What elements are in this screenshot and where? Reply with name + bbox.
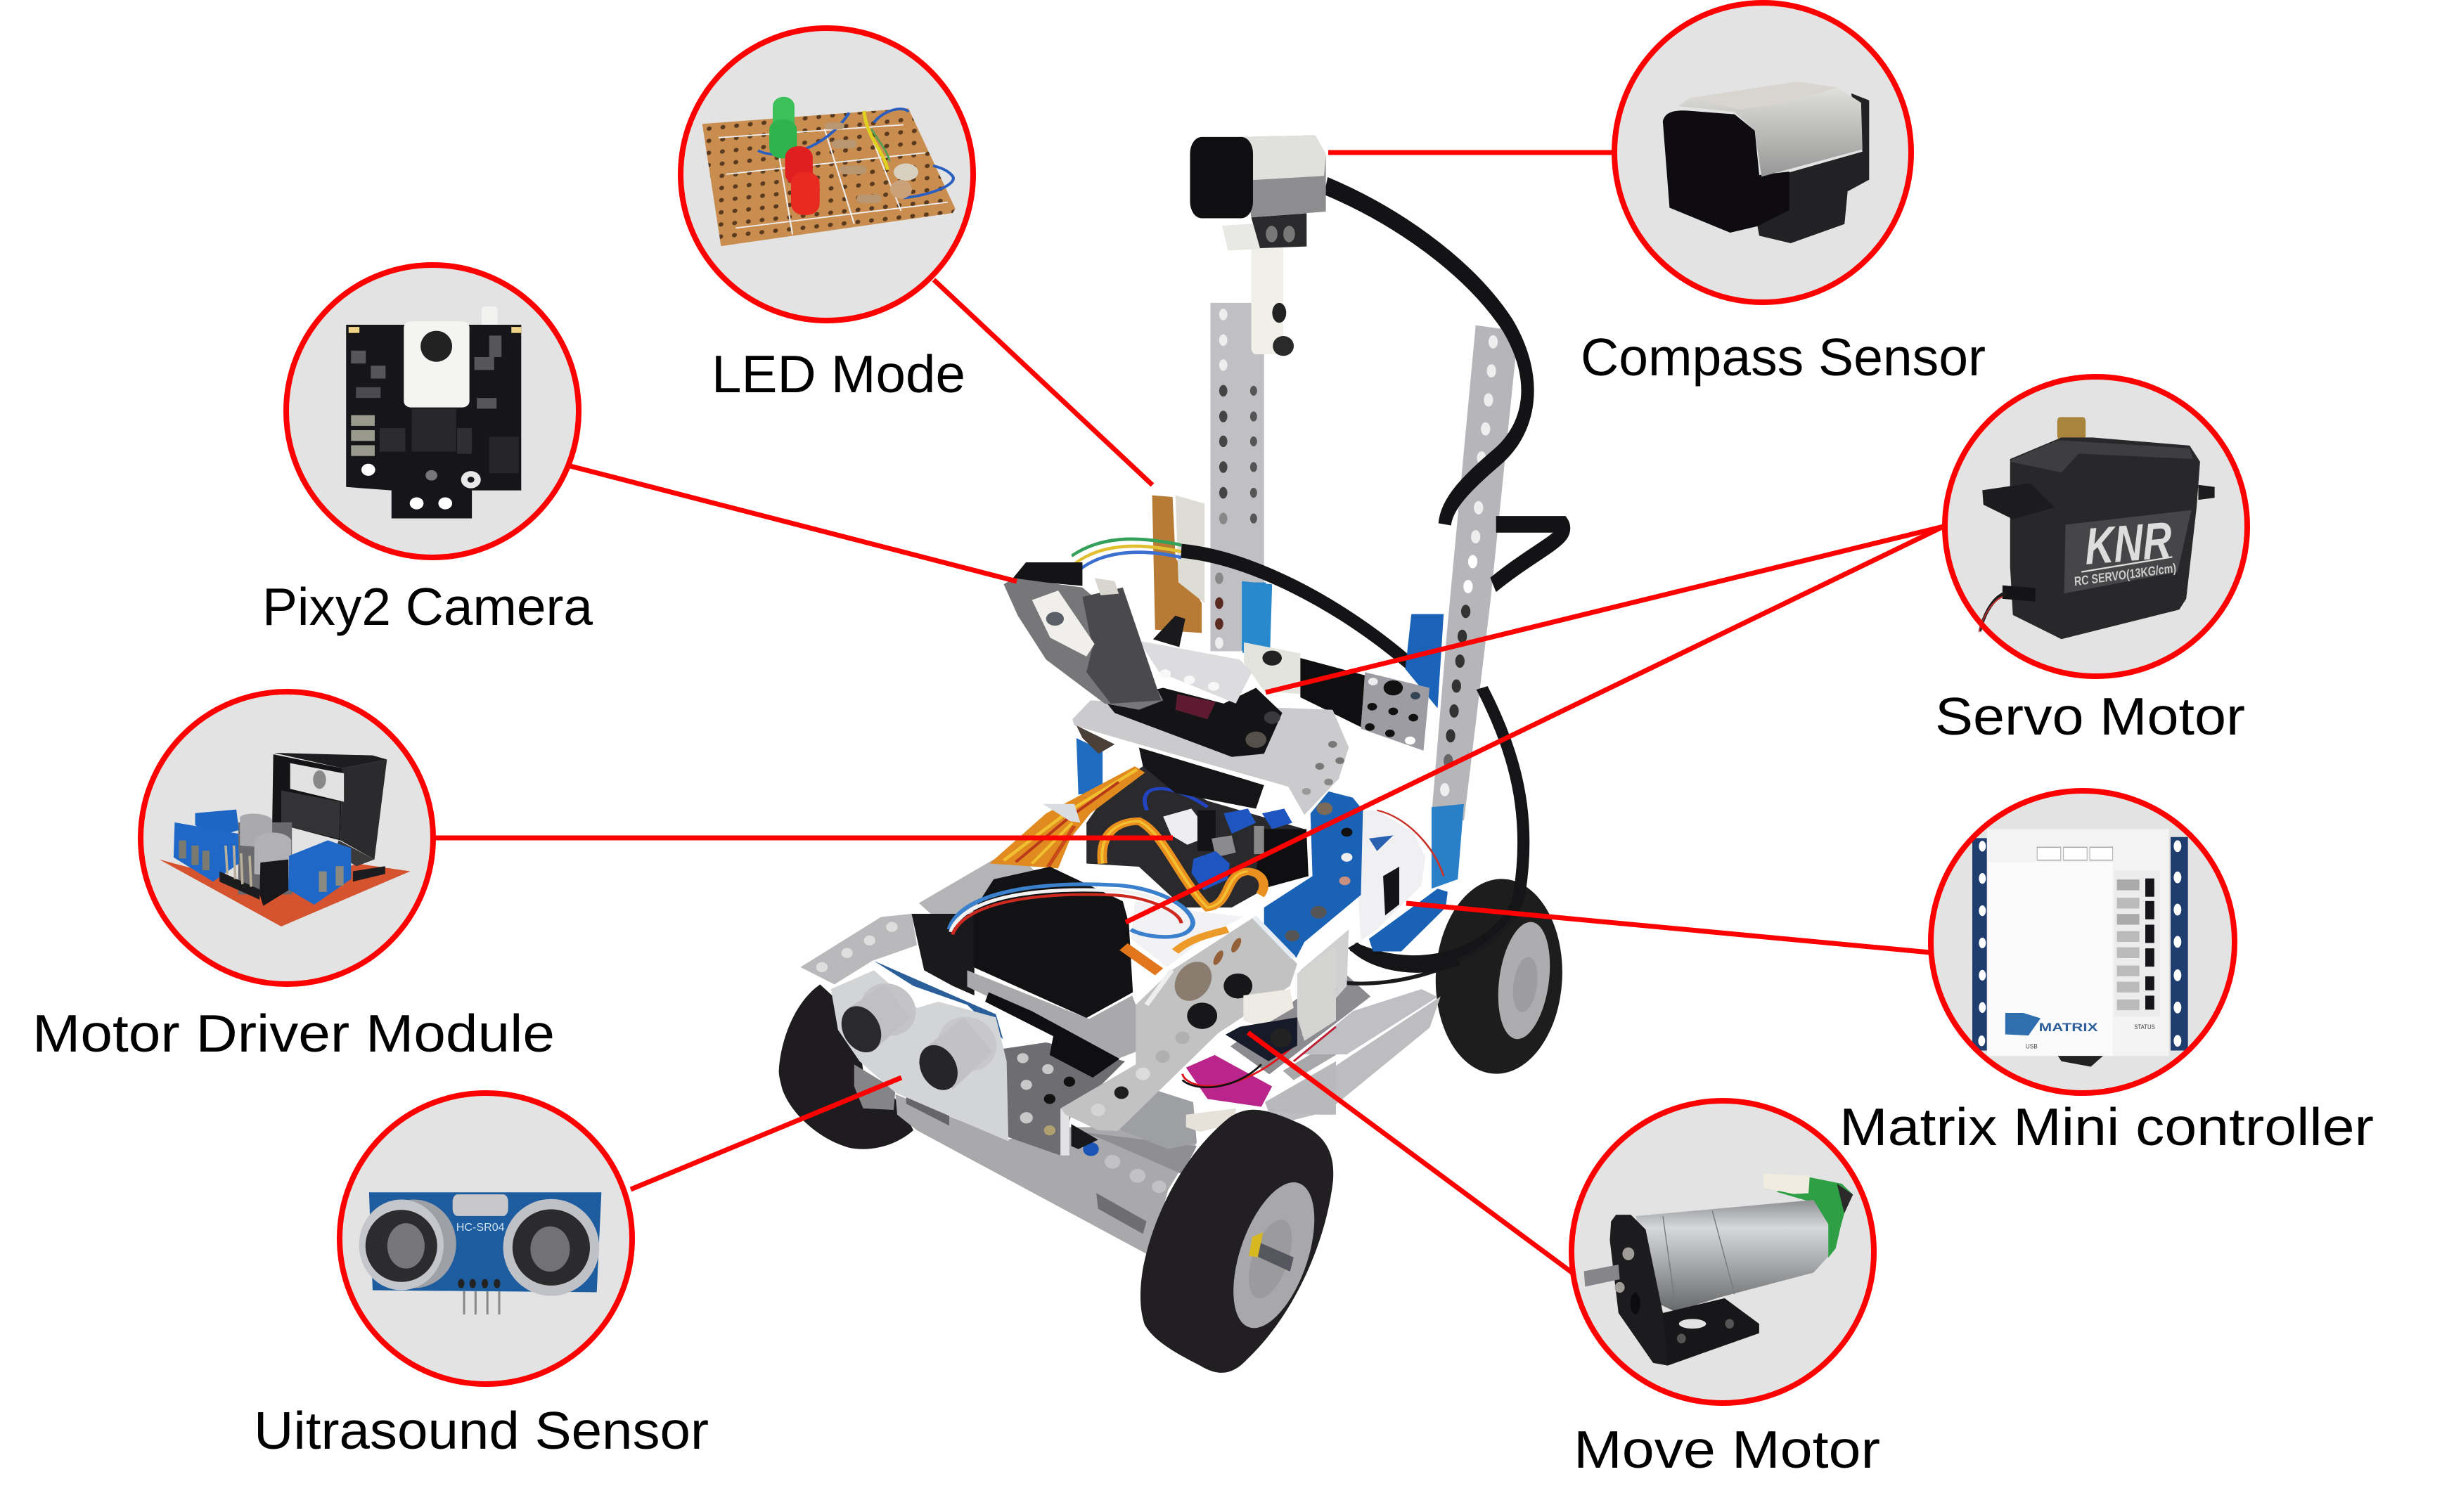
label: Servo Motor: Servo Motor bbox=[1935, 687, 2245, 746]
silver side block bbox=[1297, 945, 1336, 1041]
pan servo bbox=[1105, 688, 1283, 757]
icon: motor driver board bbox=[159, 753, 411, 926]
compass cable bbox=[1326, 186, 1528, 524]
panel: Ultrasound Sensor bbox=[340, 1093, 632, 1384]
servo bracket bbox=[1139, 616, 1252, 704]
panel: Matrix Mini controller bbox=[1931, 791, 2235, 1093]
right column blue foot bbox=[1432, 804, 1464, 889]
ultrasonic sensor mounted bbox=[831, 961, 1008, 1142]
panel: LED Mode bbox=[681, 28, 973, 321]
robot photo bbox=[779, 135, 1576, 1373]
rainbow wires bbox=[1072, 539, 1181, 570]
label: LED Mode: LED Mode bbox=[712, 344, 965, 403]
icon: Matrix Mini controller bbox=[1972, 829, 2188, 1066]
icon: Matrix Mini controller: STATUS bbox=[2134, 1023, 2155, 1030]
compass sensor on robot bbox=[1190, 135, 1326, 356]
connector: Servo Motor lower bbox=[1126, 526, 1943, 922]
connector: Move Motor bbox=[1248, 1033, 1574, 1274]
pixy camera on robot bbox=[1003, 562, 1163, 710]
icon: servo motor: RC SERVO(13KG/cm) bbox=[2074, 561, 2177, 589]
black cable front of bracket bbox=[1353, 945, 1458, 968]
rear chassis rail bbox=[1300, 989, 1438, 1054]
blue upright behind column bbox=[1242, 581, 1272, 650]
servo wire bbox=[1124, 947, 1159, 972]
cable loop bbox=[1493, 524, 1564, 585]
gear unit below beam bbox=[1226, 989, 1297, 1061]
label: Pixy2 Camera: Pixy2 Camera bbox=[262, 577, 593, 636]
icon: HC-SR04 ultrasound module bbox=[359, 1192, 601, 1314]
panel: Move Motor bbox=[1572, 1101, 1874, 1403]
left column bbox=[1210, 303, 1266, 653]
motor driver board on robot bbox=[1163, 808, 1309, 890]
right column bbox=[1432, 325, 1518, 820]
center black cable bbox=[1181, 551, 1408, 663]
label: Motor Driver Module: Motor Driver Module bbox=[32, 1004, 555, 1063]
red wire on rail bbox=[1294, 1027, 1336, 1061]
icon: servo motor bbox=[1979, 417, 2215, 639]
panel: Motor Driver Module bbox=[141, 692, 433, 984]
icon: Matrix Mini controller: MATRIX bbox=[2039, 1021, 2098, 1034]
white tape bbox=[1131, 901, 1244, 967]
blue frame bbox=[1264, 791, 1363, 957]
mid section of robot bbox=[949, 562, 1524, 1054]
icon: geared motor with bracket bbox=[1584, 1173, 1853, 1366]
LED board on robot bbox=[1152, 496, 1202, 633]
connector: Matrix Mini controller bbox=[1406, 903, 1930, 952]
side filler behind beam: rail and under-tray bbox=[919, 848, 1441, 1124]
panel: Pixy2 Camera bbox=[286, 265, 579, 557]
icon: Pixy2 board bbox=[346, 306, 521, 518]
icon: Matrix Mini controller: USB bbox=[2026, 1042, 2038, 1050]
icon: LED perfboard bbox=[702, 97, 956, 246]
connector: LED Mode bbox=[934, 280, 1152, 485]
zip tie bbox=[1043, 804, 1081, 823]
panel: Compass Sensor bbox=[1614, 3, 1911, 302]
front section: ultrasonic sensor and front beam bbox=[831, 917, 1336, 1142]
icon: HC-SR04 ultrasound module: HC-SR04 bbox=[456, 1220, 505, 1234]
rear right wheel bbox=[1421, 860, 1576, 1093]
silver end block bbox=[1300, 929, 1349, 1036]
icon: compass sensor bbox=[1663, 82, 1869, 243]
blue jumper wires bbox=[1145, 789, 1207, 810]
connector: Servo Motor upper bbox=[1266, 526, 1943, 692]
connector: Ultrasound Sensor bbox=[631, 1078, 901, 1189]
long side cable bbox=[1353, 688, 1524, 960]
label: Matrix Mini controller: Matrix Mini controller bbox=[1839, 1097, 2374, 1156]
front beam bbox=[1060, 917, 1297, 1131]
black servo on deck bbox=[973, 867, 1133, 1018]
connector: Pixy2 Camera bbox=[570, 466, 1017, 581]
rear plates bbox=[1244, 642, 1429, 751]
orange wire bundle bbox=[989, 766, 1264, 907]
upper structure: columns, LED board, cables, compass sensor bbox=[1072, 135, 1564, 820]
thin lower cable bbox=[1345, 917, 1515, 983]
connector: Motor Driver Module bbox=[435, 835, 1173, 841]
connector: Compass Sensor bbox=[1328, 150, 1617, 155]
label: Move Motor: Move Motor bbox=[1574, 1420, 1880, 1479]
lower chassis and front wheel bbox=[779, 914, 1336, 1373]
white plate behind wires bbox=[1176, 496, 1204, 603]
short orange wire bbox=[1175, 929, 1228, 952]
side bracket bbox=[1406, 614, 1444, 709]
icon: servo motor: KNR bbox=[2084, 512, 2173, 576]
dark wire bay bbox=[1086, 766, 1309, 907]
panel: Servo Motor bbox=[1945, 377, 2247, 676]
tilted servo platform bbox=[1072, 700, 1349, 815]
label: Compass Sensor: Compass Sensor bbox=[1581, 328, 1986, 387]
label: Ultrasound Sensor: Uitrasound Sensor bbox=[254, 1401, 709, 1460]
controller on robot bbox=[1358, 810, 1444, 941]
blue lower bracket bbox=[1369, 889, 1448, 952]
left blue post bbox=[1077, 738, 1103, 794]
top colored wire bbox=[949, 884, 1193, 937]
